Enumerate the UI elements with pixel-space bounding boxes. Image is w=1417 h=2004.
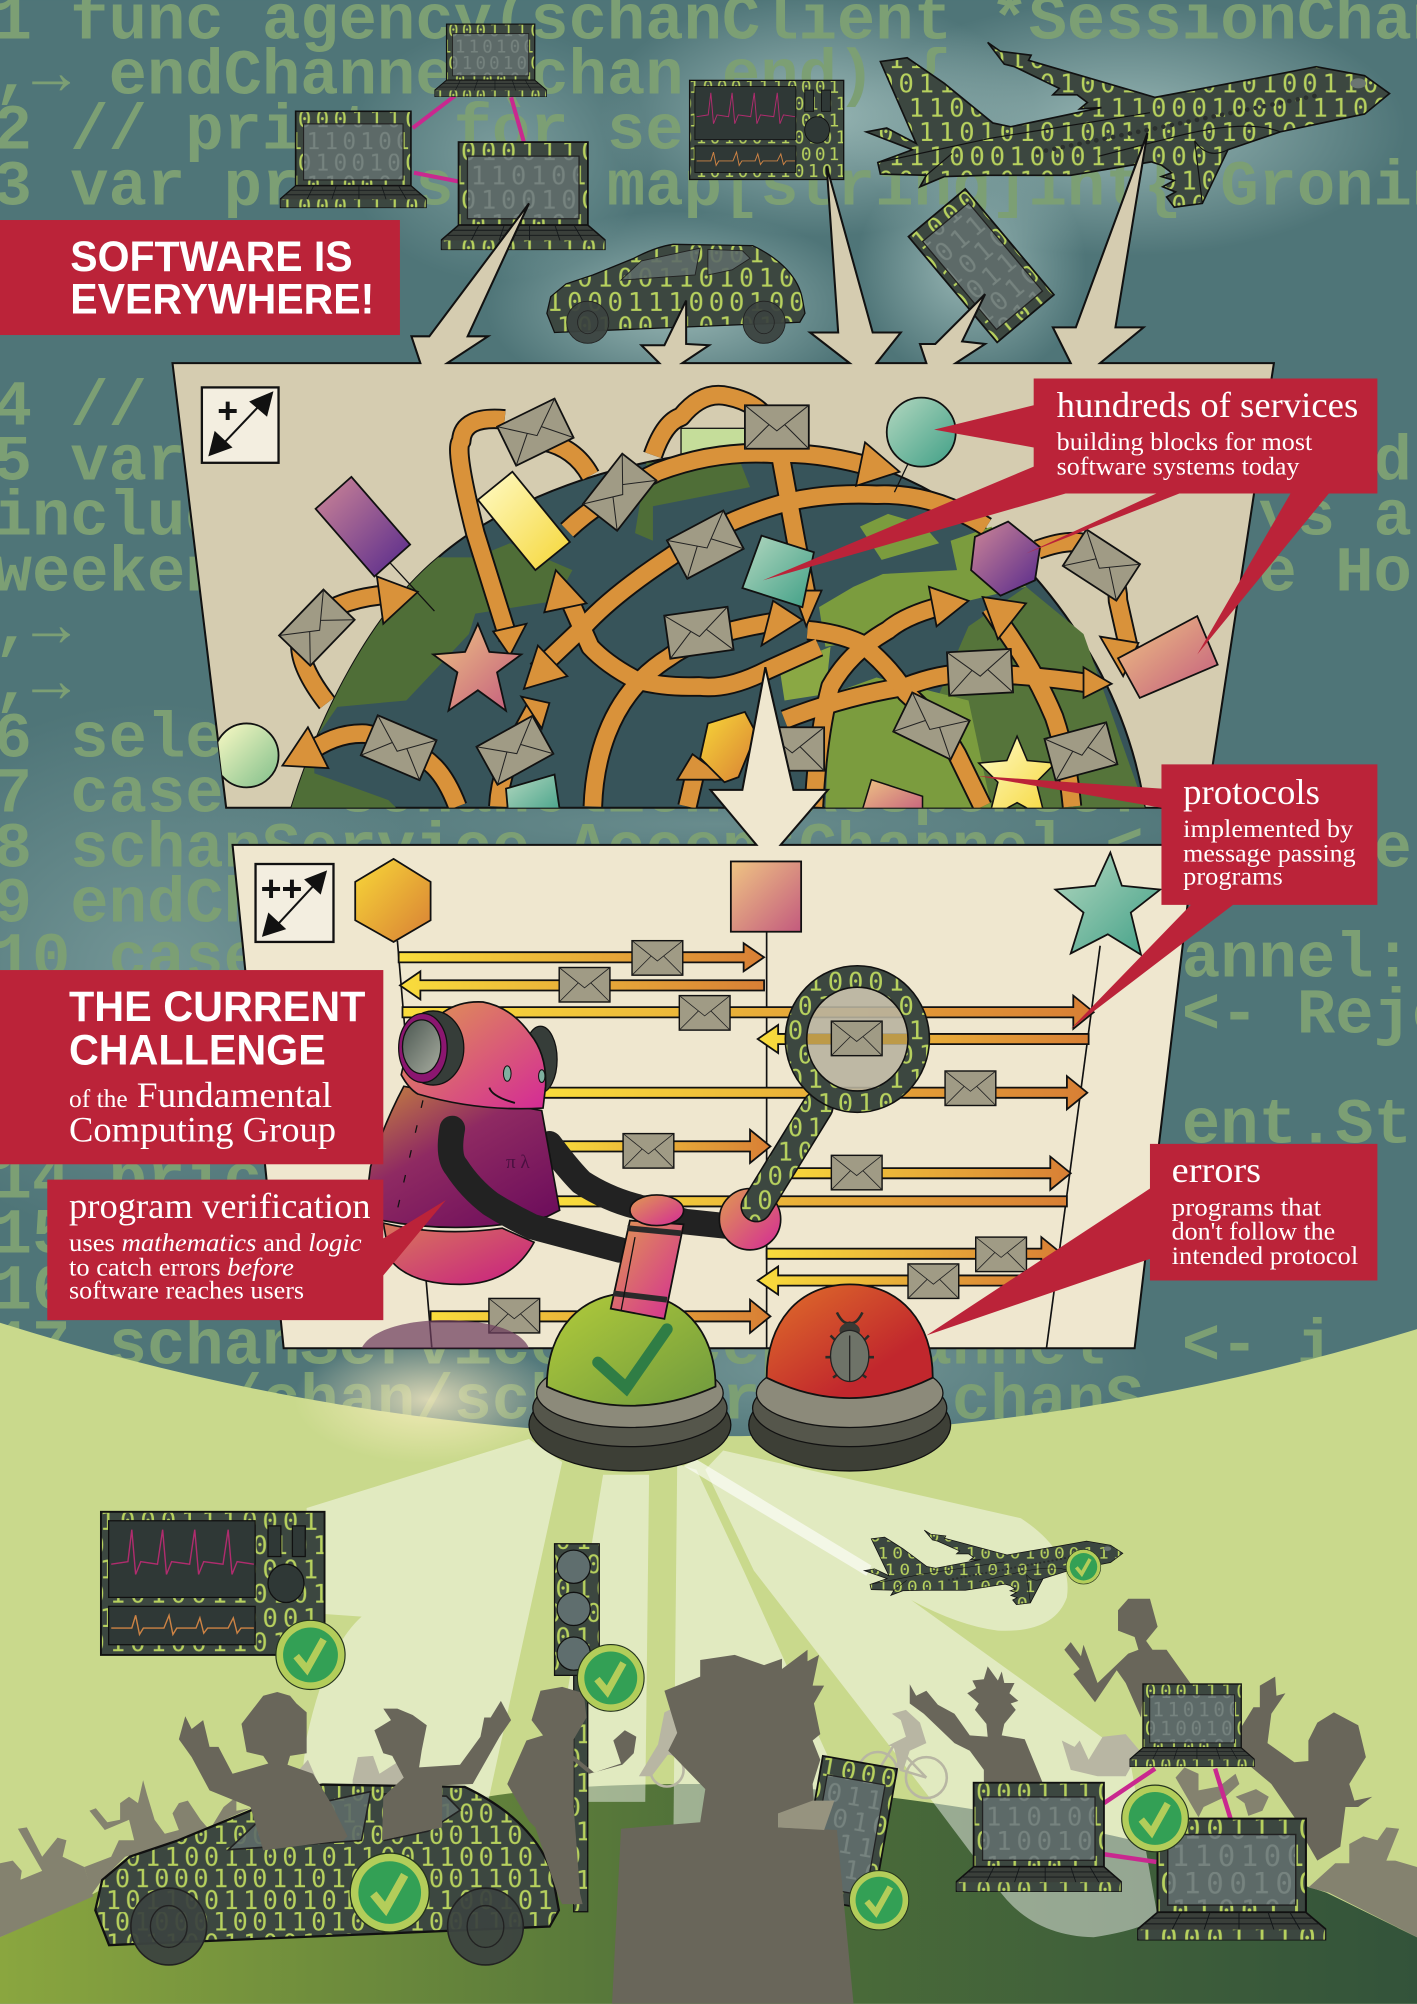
far crowd	[299, 1706, 1140, 1798]
magnifying glass	[756, 976, 919, 1206]
robot front arm	[450, 1128, 620, 1250]
icon: plus plus scale: ++	[261, 869, 302, 909]
service: teal circle	[887, 398, 956, 492]
icon: plus scale: +	[217, 391, 238, 431]
bright ray	[684, 1459, 871, 1576]
callout: errors: intended protocol	[1172, 1241, 1358, 1270]
service: teal star	[1055, 853, 1160, 955]
icon: plus scale	[202, 387, 279, 463]
background program code: 14 pric	[0, 1145, 262, 1217]
robot rear arm	[549, 1144, 735, 1227]
service: yellow star	[977, 734, 1052, 808]
background program code: 17 schanService.AcceptChannel <- i	[0, 1312, 1335, 1384]
service: pink rectangle	[1118, 616, 1218, 698]
callout: errors	[926, 1144, 1377, 1335]
robot head	[401, 1002, 546, 1109]
light rays	[300, 1439, 1158, 1937]
background program code	[0, 0, 1417, 1439]
person: rear man	[1064, 1599, 1192, 1718]
service: teal rectangle	[505, 773, 560, 808]
icon: plus plus scale	[256, 864, 333, 942]
shadow	[362, 1320, 529, 1348]
background program code: 9 endCh	[0, 870, 262, 942]
lever	[611, 1195, 684, 1319]
airplane	[866, 42, 1390, 207]
car	[547, 244, 805, 343]
callout: protocols: protocols	[1183, 772, 1320, 812]
panel: services with incoming arrows	[172, 133, 1274, 818]
mid crowd	[0, 1767, 1417, 1937]
callout: program verification: program verification	[69, 1186, 371, 1226]
background program code: 7 case <-schanClient.Response:	[0, 760, 1144, 832]
person: right man	[910, 1666, 1043, 1783]
callout: protocols: message passing	[1183, 838, 1356, 867]
service: purple rectangle	[316, 477, 434, 611]
person: left woman	[374, 1701, 511, 1840]
timeline lines	[397, 932, 1100, 1348]
background program code: include ys a	[0, 482, 1412, 554]
background glows	[0, 0, 1406, 1457]
network links	[1104, 1769, 1230, 1862]
service: lime circle	[215, 723, 279, 787]
service: pink star	[433, 624, 521, 711]
callout: errors: programs that	[1172, 1192, 1321, 1221]
orange message arrows	[282, 395, 1138, 807]
hill	[0, 1784, 1417, 2004]
robot base	[383, 1223, 534, 1284]
callout: the current challenge: THE CURRENT	[69, 983, 366, 1030]
callout: protocols	[977, 764, 1377, 1029]
button: red bug	[749, 1284, 951, 1471]
robot face	[489, 1066, 545, 1103]
laptop	[434, 24, 547, 97]
service: teal quad	[742, 536, 814, 607]
callout: software is everywhere: SOFTWARE IS	[70, 233, 353, 280]
robot hand	[719, 1189, 781, 1250]
laptop	[1137, 1819, 1326, 1940]
callout: hundreds of services	[763, 378, 1377, 654]
callout: protocols: implemented by	[1183, 814, 1353, 843]
heart monitor	[101, 1512, 325, 1655]
callout: the current challenge: Fundamental	[137, 1075, 332, 1115]
callout: software is everywhere	[0, 220, 400, 335]
callout: errors: errors	[1172, 1150, 1261, 1190]
callout: program verification	[47, 1180, 446, 1320]
car	[95, 1785, 559, 1965]
callout: software is everywhere: EVERYWHERE!	[70, 275, 374, 322]
laptop	[1130, 1684, 1255, 1766]
globe	[291, 428, 1145, 808]
button: green approve	[529, 1195, 731, 1471]
tablet	[798, 1756, 897, 1910]
robot right ear	[524, 1026, 557, 1093]
check badges	[276, 1549, 1188, 1932]
robot eye-piece	[399, 1011, 464, 1085]
person: left man	[179, 1692, 348, 1850]
top devices	[280, 24, 1390, 343]
laptop	[280, 111, 427, 207]
callout: errors: don't follow the	[1172, 1217, 1335, 1246]
service: orange hexagon	[355, 859, 431, 942]
service: yellow rectangle	[478, 472, 570, 570]
callout: the current challenge	[0, 970, 383, 1164]
callout: the current challenge: CHALLENGE	[69, 1027, 326, 1074]
background program code: 5 var d	[0, 427, 1412, 499]
tablet	[908, 189, 1054, 342]
person: center foreground	[612, 1650, 854, 2004]
background program code: 2 // print for se	[0, 96, 684, 168]
airplane	[864, 1530, 1123, 1605]
callout: program verification: to catch errors before	[69, 1252, 294, 1281]
person: woman with ponytail	[1233, 1677, 1372, 1861]
background program code: 10 case <-schanService.RejectChannel:	[0, 924, 1412, 996]
callout: protocols: programs	[1183, 861, 1283, 890]
message arrows	[399, 943, 1094, 1333]
robot	[364, 1002, 781, 1284]
check mark	[598, 1329, 667, 1388]
background program code: 6 select {	[0, 705, 377, 777]
background program code: ,→ endChannel(chan end) {	[0, 42, 952, 114]
traffic light	[555, 1544, 599, 1912]
heart monitor	[690, 80, 844, 180]
warm glow	[294, 1335, 562, 1463]
network links	[413, 95, 524, 182]
callout: program verification: software reaches users	[69, 1275, 304, 1304]
callout: the current challenge: Computing Group	[69, 1109, 336, 1149]
service: yellow hexagon	[700, 712, 756, 782]
background program code: /chan/schanService.chanS	[0, 1367, 1144, 1439]
laptop	[441, 142, 606, 249]
background program code: weekend e Ho	[0, 539, 1412, 611]
robot symbols: π λ	[506, 1152, 530, 1173]
bottom devices	[95, 1512, 1326, 1965]
envelopes	[279, 399, 1140, 785]
callout: hundreds of services: hundreds of services	[1057, 385, 1358, 425]
green foreground landscape	[0, 1323, 1417, 2004]
callout: hundreds of services: software systems today	[1057, 451, 1300, 480]
callout: the current challenge: of the	[69, 1084, 128, 1113]
robot body	[364, 1086, 560, 1227]
callout: program verification: uses mathematics and logic	[69, 1228, 362, 1257]
hand holding tablet	[778, 1801, 834, 1830]
panel: protocols	[233, 667, 1195, 1348]
envelopes	[489, 941, 1026, 1333]
person: at traffic light	[507, 1687, 636, 1904]
service nodes	[215, 398, 1218, 818]
service: pink polygon	[862, 778, 924, 808]
callout: hundreds of services: building blocks for most	[1057, 427, 1312, 456]
laptop	[956, 1783, 1122, 1891]
icon: bug	[825, 1312, 874, 1381]
service: purple hexagon	[971, 522, 1040, 596]
service: pink square	[731, 861, 801, 932]
